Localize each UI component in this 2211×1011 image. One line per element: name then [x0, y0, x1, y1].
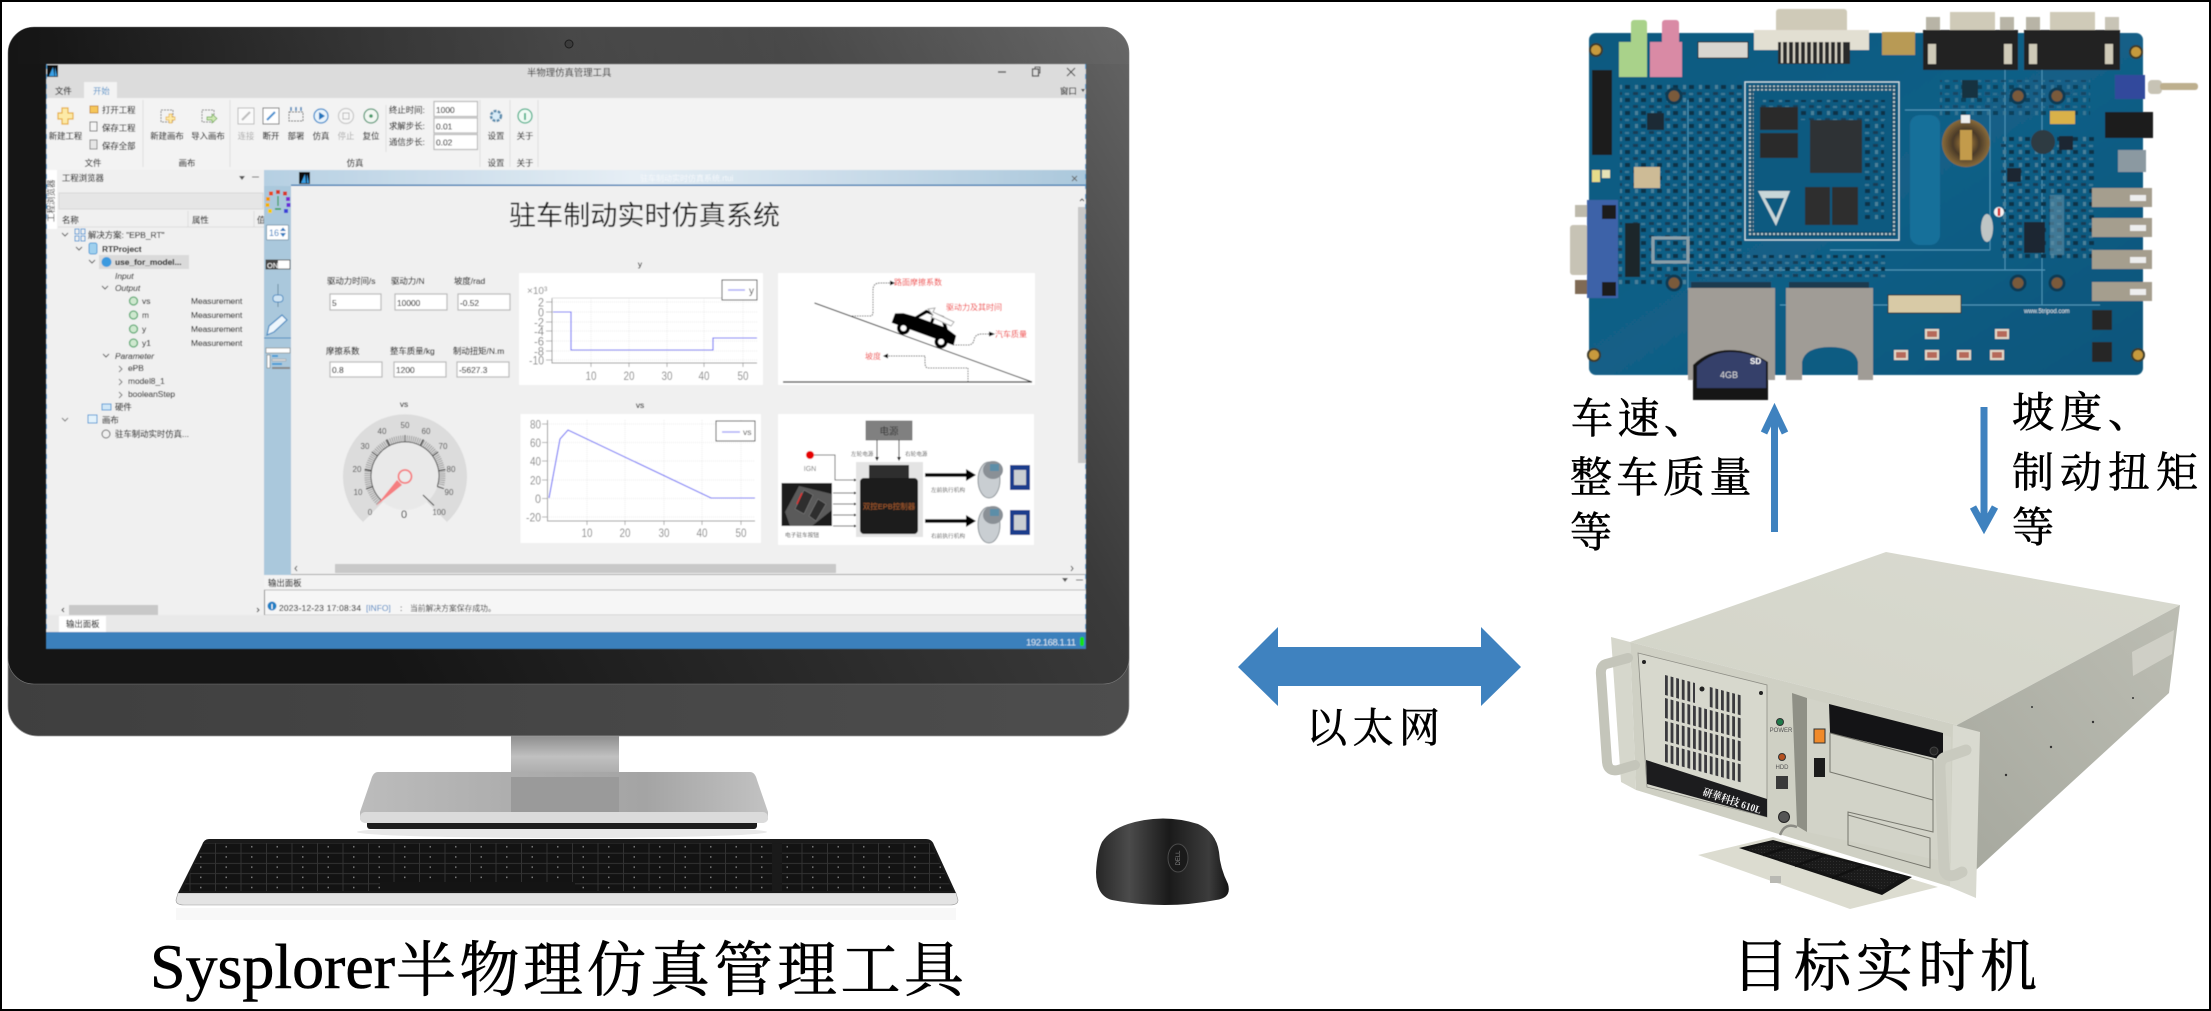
EPB architecture diagram: 双控EPB控制器: [863, 501, 916, 511]
label: slope and braking torque: 坡度、: [2012, 390, 2156, 437]
SD card slots: [1688, 282, 1873, 380]
line chart: vs: 60: [530, 436, 541, 450]
ribbon toolbar: 关于: [517, 158, 533, 168]
line chart: vs: [520, 400, 761, 543]
line chart: y: 2: [538, 296, 544, 310]
parameter inputs: 5: [332, 298, 337, 308]
speed gauge: [343, 399, 467, 522]
right rack flange: [1950, 725, 1980, 898]
parameter inputs: 1200: [396, 365, 415, 375]
left rack flange: [1611, 637, 1636, 790]
speed gauge: 80: [447, 465, 456, 474]
project tree: booleanStep: [128, 389, 175, 399]
output panel: [264, 575, 1086, 615]
line chart: vs: 40: [530, 454, 541, 468]
brand strip: [1646, 760, 1767, 817]
parameter inputs: 整车质量/kg: [390, 346, 435, 356]
line chart: y: -4: [534, 324, 544, 338]
mounting holes: [1667, 89, 2064, 290]
flex connector: [1888, 295, 1961, 313]
project tree: 驻车制动实时仿真...: [115, 429, 189, 439]
status bar: 192.168.1.11: [1026, 638, 1076, 648]
line chart: y: 50: [738, 369, 749, 383]
discrete chips: [1625, 42, 2073, 277]
status bar: [46, 632, 1086, 649]
parking button photo: [782, 483, 832, 526]
EPB architecture diagram: 右前执行机构: [931, 532, 965, 540]
EPB architecture diagram: 左前执行机构: [931, 486, 965, 494]
project tree: [62, 229, 243, 439]
optical drive: [1829, 704, 1943, 760]
ribbon toolbar: 文件: [85, 158, 101, 168]
serial connectors: [1923, 12, 2120, 70]
list icon: [266, 348, 290, 353]
project browser panel: 工程浏览器: [46, 179, 56, 222]
monitor bezel: [8, 27, 1129, 684]
webcam: [565, 40, 573, 48]
widget toolbar strip: [264, 170, 291, 575]
controller: [856, 462, 923, 537]
coin cell holder: [1942, 115, 1990, 167]
output panel: :: [400, 603, 402, 613]
project tree: 解决方案: "EPB_RT": [88, 230, 165, 240]
EPB architecture diagram: IGN: [804, 466, 816, 473]
parameter inputs: 制动扭矩/N.m: [453, 346, 504, 356]
pin header: [1592, 70, 1612, 155]
slider: [277, 284, 279, 307]
fan panel: [1638, 653, 1767, 817]
line chart: vs: 20: [530, 474, 541, 488]
output panel: 输出面板: [268, 578, 302, 588]
arrow: ethernet link: [1238, 627, 1521, 706]
parameter inputs: 坡度/rad: [454, 276, 486, 286]
on switch: [266, 260, 290, 269]
line chart: y: [519, 259, 763, 385]
window title bar: 文件: [55, 86, 72, 96]
label: speed and vehicle mass: 车速、: [1571, 397, 1711, 443]
ribbon toolbar: 新建画布: [150, 131, 184, 141]
parameter inputs: 10000: [397, 298, 421, 308]
window title bar: 窗口: [1060, 86, 1077, 96]
ribbon toolbar: 通信步长:: [389, 137, 425, 147]
HDMI connector: [1882, 32, 1915, 55]
project browser panel: 工程浏览器: [62, 173, 104, 183]
line chart: y: -2: [534, 316, 544, 330]
output panel: 2023-12-23 17:08:34: [279, 603, 361, 613]
line chart: vs: 10: [582, 526, 593, 540]
line chart: y: 20: [624, 369, 635, 383]
push buttons: [1895, 330, 2008, 359]
SMD component fields: [1612, 80, 2095, 285]
left handle: [1601, 658, 1635, 770]
speed gauge: 50: [401, 421, 410, 430]
line chart: vs: 50: [736, 526, 747, 540]
project tree: Measurement: [191, 338, 243, 348]
speed gauge: 20: [353, 465, 362, 474]
chassis front: [1630, 642, 1957, 888]
output panel: 当前解决方案保存成功。: [410, 603, 496, 613]
project tree: vs: [142, 296, 150, 306]
widget toolbar strip: ON: [267, 261, 278, 270]
ribbon toolbar: 1000: [436, 105, 455, 115]
compliance label: [2132, 630, 2174, 676]
speed gauge: 0: [401, 509, 407, 521]
ribbon toolbar: 设置: [488, 131, 504, 141]
application screen: [46, 64, 1086, 649]
ribbon toolbar: 0.01: [436, 122, 453, 132]
line chart: vs: 80: [530, 418, 541, 432]
ribbon toolbar: 仿真: [313, 131, 329, 141]
ribbon toolbar: 断开: [263, 131, 279, 141]
icon: colour gauge: [266, 190, 290, 213]
open filter door: [1698, 826, 1938, 909]
arrow: up to board: [1764, 411, 1785, 532]
SD card: 4GB: [1720, 370, 1738, 380]
monitor stand: [357, 736, 768, 838]
chassis side: [1957, 605, 2180, 870]
project tree: ePB: [128, 363, 144, 373]
ribbon toolbar: 保存工程: [102, 123, 136, 133]
monitor: [8, 27, 1129, 838]
line chart: vs: 0: [535, 492, 541, 506]
fan panel: 研華科技 610L: [1701, 785, 1763, 817]
line chart: vs: vs: [743, 427, 752, 437]
project browser panel: [46, 170, 266, 632]
arrow: down to target machine: [1973, 407, 1995, 527]
dashboard title: 驻车制动实时仿真系统: [509, 201, 780, 231]
line chart: vs: 20: [620, 526, 631, 540]
project tree: RTProject: [102, 244, 142, 254]
line chart: vs: vs: [636, 400, 644, 410]
indicator column: HDD: [1776, 765, 1789, 771]
spin box: [266, 225, 288, 240]
USB ports: [2092, 188, 2152, 301]
EPB architecture diagram: 右轮电源: [905, 450, 928, 458]
ribbon toolbar: 关于: [517, 131, 533, 141]
speed gauge: 30: [361, 442, 370, 451]
EPB architecture diagram: 电子驻车按钮: [785, 531, 819, 539]
line chart: y: y: [749, 286, 754, 297]
ribbon toolbar: 连接: [238, 131, 255, 141]
label: slope and braking torque: 制动扭矩: [2012, 451, 2204, 497]
ribbon toolbar: [46, 98, 1086, 170]
project browser panel: 值: [257, 215, 266, 225]
dashboard canvas: [291, 186, 1086, 592]
label: speed and vehicle mass: 等: [1570, 511, 1617, 557]
ribbon toolbar: 求解步长:: [389, 121, 425, 131]
speed gauge: 90: [445, 488, 454, 497]
PCB body: [1589, 33, 2143, 375]
line chart: vs: -20: [526, 510, 541, 524]
parameter inputs: 驱动力时间/s: [327, 276, 375, 286]
project browser panel: 属性: [192, 215, 209, 225]
window title bar: [46, 64, 1086, 98]
SD card: SD: [1750, 357, 1761, 366]
parameter inputs: -0.52: [460, 298, 479, 308]
ribbon toolbar: 0.02: [436, 138, 453, 148]
embedded board photo: [1570, 9, 2198, 400]
line chart: y: y: [638, 259, 643, 269]
parameter inputs: -5627.3: [459, 365, 488, 375]
line chart: y: ×10³: [527, 286, 548, 297]
project tree: Measurement: [191, 310, 243, 320]
right handle: [1940, 750, 1966, 876]
power jack and switch: [2050, 75, 2198, 172]
mouse: [1096, 818, 1229, 905]
ribbon toolbar: 新建工程: [49, 131, 83, 141]
ribbon toolbar: 停止: [338, 131, 354, 141]
icon: new project: [58, 108, 73, 124]
project browser panel: 名称: [62, 215, 79, 225]
parameter inputs: [326, 276, 510, 377]
drive bay: [1792, 693, 1951, 868]
slope diagram panel: 路面摩擦系数: [894, 277, 942, 287]
slope diagram panel: [778, 273, 1035, 385]
output panel: [INFO]: [366, 603, 391, 613]
line chart: y: 0: [538, 306, 544, 320]
line chart: y: -6: [534, 334, 544, 348]
project tree: y: [142, 324, 147, 334]
mouse: DELL: [1176, 850, 1182, 866]
ribbon toolbar: 仿真: [347, 158, 363, 168]
project tree: Output: [115, 283, 141, 293]
ribbon toolbar: 导入画布: [191, 131, 225, 141]
document title bar: 驻车制动实时仿真系统.rtui: [640, 173, 734, 183]
icon: pencil: [267, 315, 287, 335]
DVI connector: [1754, 9, 1869, 64]
parameter inputs: 驱动力/N: [391, 276, 424, 286]
label: speed and vehicle mass: 整车质量: [1570, 456, 1756, 502]
embedded board photo: www.5tripod.com: [2023, 309, 2070, 315]
brake actuators: [978, 461, 1030, 543]
speed gauge: 70: [439, 442, 448, 451]
ribbon toolbar: 保存全部: [102, 141, 136, 151]
widget toolbar strip: 16: [269, 228, 279, 238]
line chart: y: 10: [586, 369, 597, 383]
parameter inputs: 0.8: [332, 365, 344, 375]
slope diagram panel: 驱动力及其时间: [946, 302, 1002, 312]
speed gauge: 100: [432, 508, 446, 517]
EPB architecture diagram: [778, 414, 1034, 545]
project tree: y1: [142, 338, 151, 348]
project tree: 画布: [102, 415, 119, 425]
ribbon toolbar: 打开工程: [102, 105, 136, 115]
chassis top: [1630, 552, 2180, 725]
slope diagram panel: 坡度: [865, 351, 881, 361]
window title bar: 开始: [93, 86, 110, 96]
project tree: use_for_model...: [115, 257, 182, 267]
line chart: y: 40: [698, 369, 710, 383]
project tree: Measurement: [191, 296, 243, 306]
target real-time machine: [1601, 552, 2180, 909]
audio jacks: [1619, 20, 1682, 77]
indicator column: POWER: [1770, 728, 1793, 734]
project tree: 硬件: [115, 402, 132, 412]
line chart: vs: 40: [696, 526, 708, 540]
title: Sysplorer tool: 半物理仿真管理工具: [396, 938, 968, 1004]
line chart: y: 30: [662, 369, 673, 383]
label: slope and braking torque: 等: [2012, 506, 2060, 552]
SD card: [1693, 350, 1768, 400]
bottom tab row: [46, 615, 1086, 632]
PCB traces: [1688, 70, 2100, 305]
slope diagram panel: 汽车质量: [995, 329, 1027, 339]
project tree: Measurement: [191, 324, 243, 334]
ribbon toolbar: 部署: [288, 131, 304, 141]
EPB architecture diagram: 电源: [879, 426, 899, 438]
VGA connector: [1570, 200, 1618, 298]
ribbon toolbar: 复位: [363, 131, 379, 141]
ribbon toolbar: 设置: [488, 158, 504, 168]
parameter inputs: 摩擦系数: [326, 346, 360, 356]
indicator column: [1770, 718, 1793, 822]
label: ethernet: 以太网: [1306, 705, 1446, 751]
line chart: vs: 30: [658, 526, 670, 540]
project tree: Parameter: [115, 351, 155, 361]
icon: car: [889, 300, 962, 352]
ribbon toolbar: 终止时间:: [389, 105, 425, 115]
speed gauge: vs: [400, 399, 408, 409]
speed gauge: 60: [422, 427, 431, 436]
speed gauge: 0: [368, 508, 373, 517]
monitor chin: [8, 600, 1129, 736]
project tree: Input: [115, 271, 134, 281]
document title bar: [264, 170, 1086, 186]
line chart: y: -10: [529, 354, 544, 368]
ribbon toolbar: 画布: [179, 158, 195, 168]
project tree: m: [142, 310, 149, 320]
keyboard: [176, 839, 958, 920]
window title bar: 半物理仿真管理工具: [527, 67, 611, 78]
title: Sysplorer tool: Sysplorer: [150, 931, 395, 1002]
speed gauge: 40: [378, 427, 387, 436]
title: target real-time machine: 目标实时机: [1732, 936, 2042, 999]
project tree: model8_1: [128, 376, 165, 386]
core module: [1745, 82, 1899, 240]
bottom tab row: 输出面板: [66, 619, 100, 629]
EPB architecture diagram: 左轮电源: [851, 450, 874, 458]
speed gauge: 10: [354, 488, 363, 497]
line chart: y: -8: [534, 344, 544, 358]
